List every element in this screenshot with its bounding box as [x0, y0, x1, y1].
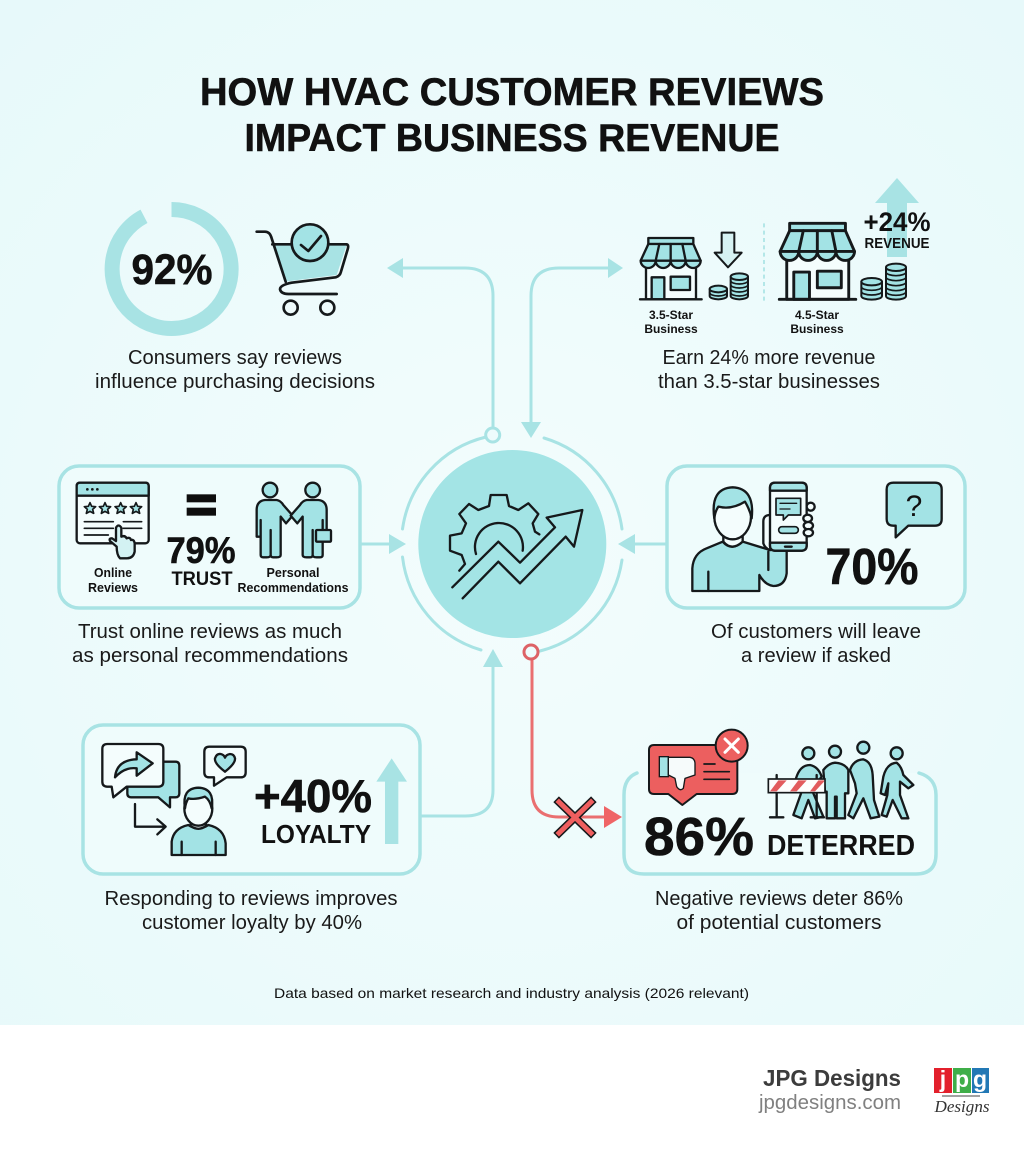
icon: road barrier [768, 775, 825, 817]
footer logo [933, 1066, 990, 1116]
connector: hub to deterred panel [524, 645, 622, 833]
caption: Negative reviews deter 86% [655, 888, 903, 910]
trust value: 79% [166, 530, 236, 571]
connector: loyalty panel to hub [420, 649, 503, 816]
open-top panel frame [624, 773, 936, 874]
label: online reviews: Reviews [88, 581, 138, 595]
revenue label: REVENUE [864, 235, 930, 252]
icon: speech bubble with arrow [102, 744, 163, 797]
title [200, 71, 824, 160]
caption [95, 347, 375, 393]
icon: person holding phone [692, 483, 815, 591]
value: +40% [254, 770, 372, 822]
panel icons [77, 483, 331, 558]
caption: a review if asked [741, 645, 891, 667]
title: HOW HVAC CUSTOMER REVIEWS [200, 71, 824, 114]
label: 4.5-star business: 4.5-Star [795, 308, 839, 322]
label: personal recommendations [238, 566, 349, 595]
label: 3.5-star business [644, 308, 698, 336]
icon: negative review bubble [649, 730, 748, 805]
footer brand text: jpgdesigns.com [758, 1092, 901, 1114]
icon: down arrow [715, 233, 742, 267]
trust label: TRUST [172, 569, 233, 590]
panel icons [649, 730, 913, 818]
connector: trust panel to hub [360, 534, 406, 554]
footer logo: p [955, 1066, 969, 1092]
caption [658, 347, 880, 393]
icon: small coins [710, 273, 748, 299]
caption: than 3.5-star businesses [658, 371, 880, 393]
icon: group of people [793, 742, 913, 818]
red line [532, 658, 606, 817]
divider [761, 223, 766, 301]
footer brand text [758, 1065, 901, 1114]
big up arrow [875, 178, 919, 257]
icon: elbow arrow [135, 804, 166, 834]
stat: 24 percent more revenue [640, 178, 930, 393]
footer logo: j [939, 1066, 946, 1092]
caption: Consumers say reviews [128, 347, 342, 369]
panel: 70 percent leave review [667, 466, 965, 667]
icon: handshake [257, 483, 331, 557]
panel: 86 percent deterred [624, 730, 936, 934]
caption [711, 621, 921, 667]
panel frame [667, 466, 965, 608]
connector: hub to 92% stat [387, 258, 493, 428]
caption: Trust online reviews as much [78, 621, 342, 643]
caption: customer loyalty by 40% [142, 912, 362, 934]
hub icon: gear and arrow [450, 495, 582, 598]
icon: up arrow [376, 758, 407, 844]
label: personal recommendations: Personal [266, 566, 320, 580]
revenue value: +24% [864, 207, 930, 237]
icon: 4.5-star store [779, 223, 856, 299]
label: 4.5-star business [790, 308, 844, 336]
donut chart [112, 209, 231, 328]
footer logo: Designs [933, 1097, 990, 1116]
connector: 4.5-star stat to hub [521, 258, 623, 438]
caption: influence purchasing decisions [95, 371, 375, 393]
icon: large coins [861, 264, 906, 300]
caption: Of customers will leave [711, 621, 921, 643]
icon: red X [559, 802, 591, 833]
caption [104, 888, 398, 934]
red node [524, 645, 538, 659]
connector: 70% panel to hub [618, 534, 667, 554]
icon: review browser window [77, 483, 149, 558]
value: 86% [644, 807, 754, 867]
red arrowhead [604, 806, 622, 828]
icon: shopping cart with check [257, 224, 348, 315]
label: online reviews: Online [94, 566, 132, 580]
value: 70% [826, 538, 918, 595]
title: IMPACT BUSINESS REVENUE [244, 117, 780, 160]
label: 3.5-star business: Business [644, 322, 698, 336]
caption: Earn 24% more revenue [662, 347, 876, 369]
icon: speech bubble behind [127, 762, 179, 807]
hub outer ring [402, 437, 622, 651]
caption: as personal recommendations [72, 645, 348, 667]
panel icons [692, 483, 942, 591]
hub: central circle with gear and rising arrow [402, 428, 622, 651]
icon: question bubble [887, 483, 942, 537]
source note: Data based on market research and industry analysis (2026 relevant) [274, 985, 749, 1001]
hub node: teal [486, 428, 500, 442]
label: LOYALTY [261, 819, 371, 849]
panel frame [83, 725, 420, 874]
panel: 40 percent loyalty [83, 725, 420, 934]
footer brand text: JPG Designs [763, 1065, 901, 1091]
icon: heart bubble [204, 747, 246, 786]
icon: equals sign [187, 494, 216, 516]
panel: 79 percent trust [59, 466, 360, 667]
stat: 92 percent [95, 209, 375, 393]
panel icons [102, 744, 407, 855]
label: 4.5-star business: Business [790, 322, 844, 336]
icon: 3.5-star store [640, 238, 702, 299]
caption [655, 888, 903, 934]
caption: of potential customers [676, 912, 882, 934]
label: DETERRED [767, 830, 915, 862]
hub disc [418, 450, 606, 638]
panel frame [59, 466, 360, 608]
label: 3.5-star business: 3.5-Star [649, 308, 693, 322]
business comparison icons [640, 223, 906, 301]
label: personal recommendations: Recommendations [238, 581, 349, 595]
icon: person [172, 788, 226, 855]
caption: Responding to reviews improves [104, 888, 398, 910]
donut value: 92% [132, 246, 212, 294]
footer logo: g [973, 1066, 987, 1092]
label: online reviews [88, 566, 138, 595]
caption [72, 621, 348, 667]
icon: curved arrow [115, 752, 153, 777]
question mark: ? [906, 490, 922, 523]
